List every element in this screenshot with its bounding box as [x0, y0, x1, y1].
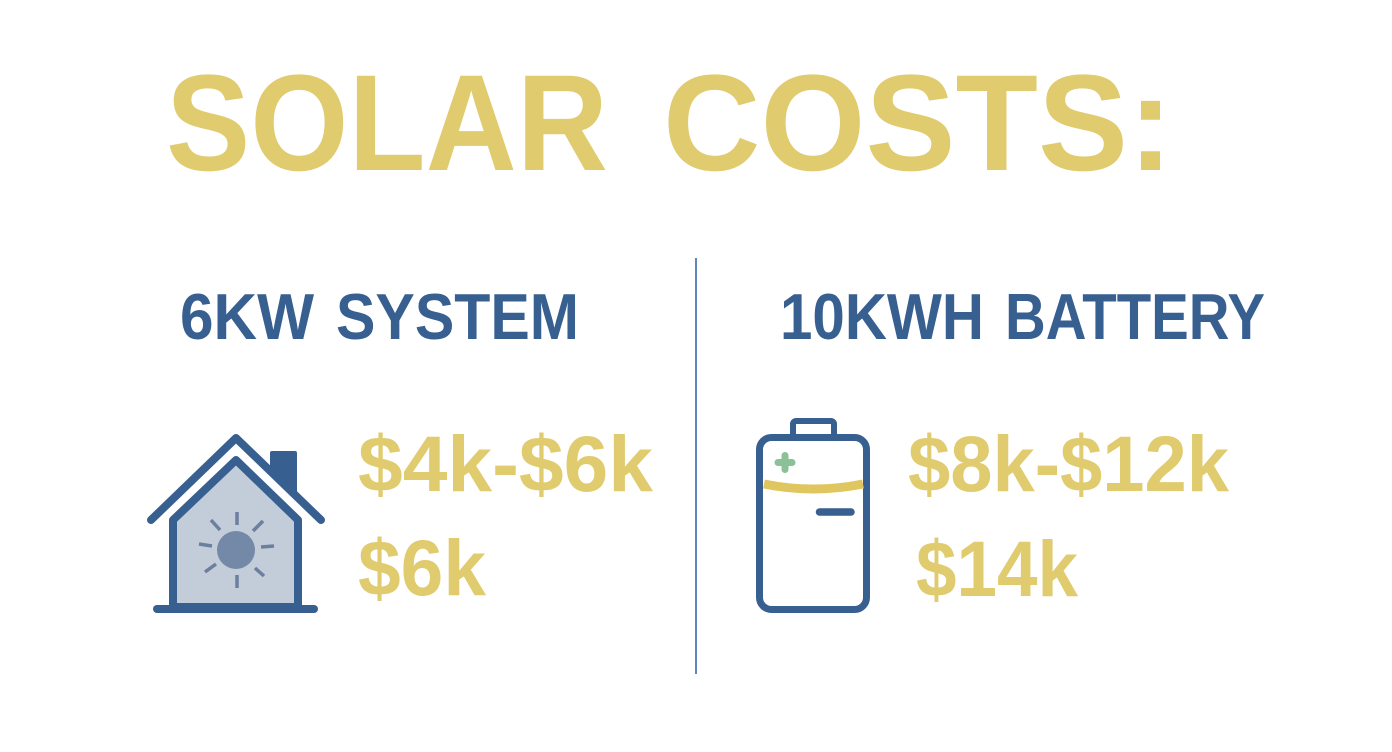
battery charge band: [764, 484, 863, 489]
price total: 10kWh battery: $14k: [916, 524, 1079, 613]
sun rays: [199, 512, 274, 588]
title: SOLAR: [166, 47, 608, 200]
icon: battery: [760, 421, 866, 610]
sun disc: [217, 531, 255, 569]
heading: 6kW system: 6KW: [180, 280, 315, 353]
divider between panels: [695, 258, 697, 674]
price range: 10kWh battery: $8k-$12k: [908, 419, 1230, 508]
battery minus sign: [820, 508, 851, 516]
price range: 6kW system: $4k-$6k: [358, 419, 654, 508]
house chimney: [270, 451, 297, 498]
heading: 10kWh battery: [780, 280, 1265, 353]
heading: 6kW system: SYSTEM: [336, 280, 579, 353]
panel: 6kW system: [151, 280, 654, 612]
house ground line: [157, 605, 314, 613]
panel: 10kWh battery: [760, 280, 1265, 613]
icon: house with sun: [151, 438, 321, 609]
title: COSTS:: [663, 47, 1173, 200]
battery plus sign: [778, 456, 792, 470]
price total: 6kW system: $6k: [358, 523, 487, 612]
battery terminal: [793, 421, 834, 436]
heading: 10kWh battery: 10KWH: [780, 280, 984, 353]
house roof: [151, 438, 321, 520]
house body: [173, 460, 298, 607]
heading: 10kWh battery: BATTERY: [1005, 280, 1265, 353]
title: [166, 47, 1173, 200]
battery body: [760, 438, 866, 610]
heading: 6kW system: [180, 280, 579, 353]
